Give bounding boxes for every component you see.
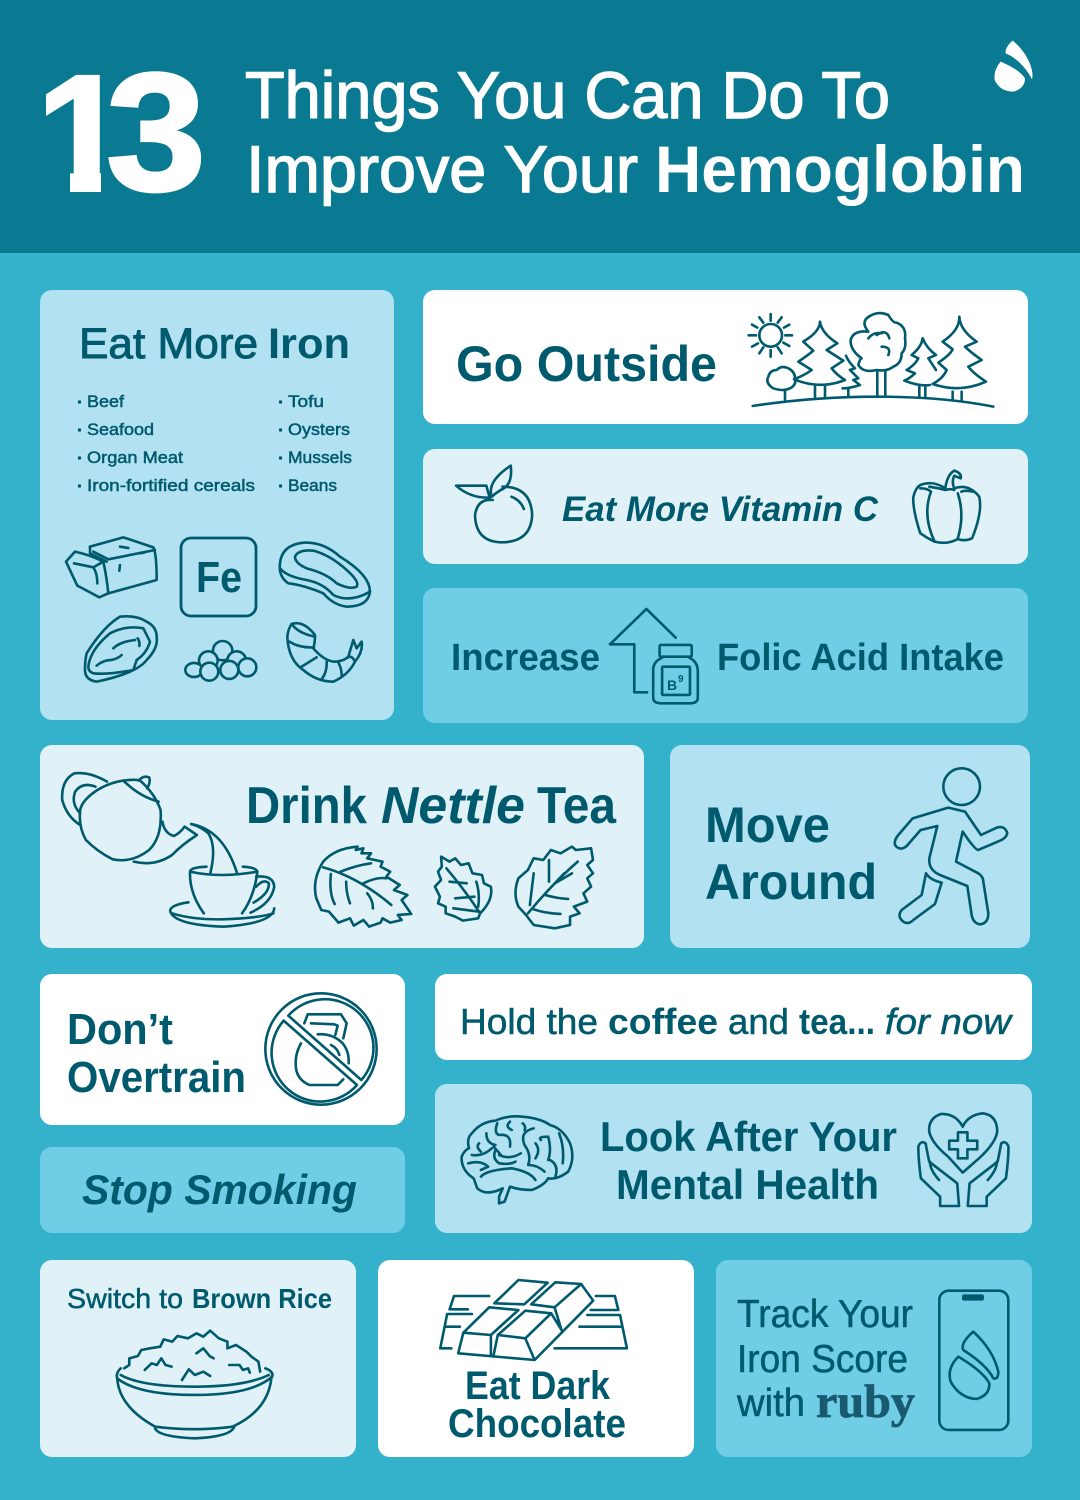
title — [245, 58, 1025, 206]
icon: beans — [185, 641, 256, 681]
panel: brown rice — [40, 1260, 356, 1457]
text line: coffee — [608, 1001, 718, 1042]
heading — [736, 1293, 916, 1428]
heading: Nettle — [381, 777, 525, 835]
iron food list: Beans — [288, 476, 337, 495]
panel: hold the coffee and tea — [435, 974, 1032, 1060]
panel: move around — [670, 745, 1030, 948]
icon: orange — [456, 466, 532, 542]
panel: eat more iron — [40, 290, 394, 720]
heading: Drink — [246, 777, 367, 835]
icon: nettle leaf three — [516, 847, 593, 928]
heading: Switch to — [67, 1283, 183, 1314]
panel: dark chocolate — [378, 1260, 694, 1457]
iron food list: Oysters — [288, 420, 350, 439]
panel: eat more vitamin c — [423, 449, 1028, 564]
iron food list: Tofu — [288, 392, 324, 411]
icon: tofu — [66, 537, 157, 597]
icon: nettle leaf two — [435, 857, 491, 921]
heading: Eat Dark — [465, 1364, 611, 1408]
text line — [460, 1001, 1013, 1042]
text line: and — [728, 1001, 789, 1042]
heading: Overtrain — [67, 1053, 246, 1102]
heading — [79, 320, 350, 368]
heading — [448, 1364, 626, 1446]
heading: Track Your — [737, 1293, 913, 1336]
panel: track iron score — [716, 1260, 1032, 1457]
iron food list — [78, 392, 352, 495]
title: Hemoglobin — [655, 132, 1025, 206]
panel: don't overtrain — [40, 974, 405, 1125]
icon: b9 supplement jar — [653, 645, 698, 703]
heading — [246, 777, 617, 835]
icon: shrimp — [287, 623, 362, 682]
iron food list: Seafood — [87, 420, 154, 439]
title: Improve Your — [246, 132, 638, 206]
heading: ruby — [816, 1376, 916, 1428]
heading: Stop Smoking — [82, 1166, 357, 1213]
icon: nettle leaf one — [315, 847, 411, 927]
number 13: 1 — [36, 40, 129, 228]
text line: tea... — [799, 1001, 875, 1042]
icon: oyster — [85, 616, 157, 682]
heading — [600, 1113, 897, 1208]
heading — [67, 1005, 246, 1102]
iron food list: Iron-fortified cereals — [87, 476, 255, 495]
icon: ruby logo drop — [994, 41, 1033, 92]
icon: b9 supplement jar: B — [667, 677, 677, 693]
heading: Eat More — [79, 320, 258, 368]
icon: brain — [462, 1116, 572, 1203]
icon: runner — [895, 768, 1007, 924]
panel: drink nettle tea — [40, 745, 644, 948]
icon: chocolate bar — [440, 1280, 627, 1360]
heading: Tea — [537, 777, 617, 835]
text: folic acid intake: Folic Acid Intake — [717, 637, 1004, 679]
panel: go outside — [423, 290, 1028, 424]
header banner — [0, 0, 1080, 253]
panel: increase folic acid — [423, 588, 1028, 723]
icon: bell pepper — [913, 471, 980, 543]
icon: hands holding heart — [918, 1113, 1008, 1206]
heading: Look After Your — [600, 1113, 897, 1160]
heading: Brown Rice — [192, 1283, 332, 1314]
iron food list: Organ Meat — [87, 448, 183, 467]
heading: Iron Score — [737, 1338, 908, 1381]
text: increase: Increase — [451, 637, 600, 679]
heading: Eat More Vitamin C — [562, 490, 879, 529]
heading: Go Outside — [456, 336, 717, 392]
number 13: 3 — [106, 38, 206, 226]
text line: for now — [885, 1001, 1013, 1042]
icon: rice bowl — [117, 1331, 272, 1438]
heading: Chocolate — [448, 1402, 626, 1446]
title: Things You Can Do To — [245, 58, 890, 132]
heading — [705, 797, 877, 910]
icon: no kettlebell — [265, 993, 377, 1105]
text line: Hold the — [460, 1001, 598, 1042]
icon: b9 supplement jar: 9 — [678, 674, 684, 685]
heading: Don’t — [67, 1005, 173, 1054]
iron food list: Mussels — [288, 448, 352, 467]
iron food list: Beef — [87, 392, 124, 411]
heading — [67, 1283, 332, 1314]
icon: iron element box: Fe — [196, 553, 242, 602]
icon: iron element box — [181, 538, 256, 616]
heading: Iron — [268, 320, 350, 368]
icon: phone with logo — [939, 1291, 1008, 1430]
panel: mental health — [435, 1084, 1032, 1233]
icon: steak — [280, 543, 370, 607]
panel: stop smoking — [40, 1147, 405, 1233]
heading: Move — [705, 797, 830, 853]
icon: up arrow — [610, 609, 676, 692]
heading: with — [736, 1382, 805, 1425]
heading: Around — [705, 854, 877, 910]
icon: teapot and cup — [62, 773, 274, 927]
number 13 — [46, 71, 202, 194]
icon: sun and forest — [749, 313, 993, 407]
heading: Mental Health — [616, 1161, 879, 1208]
